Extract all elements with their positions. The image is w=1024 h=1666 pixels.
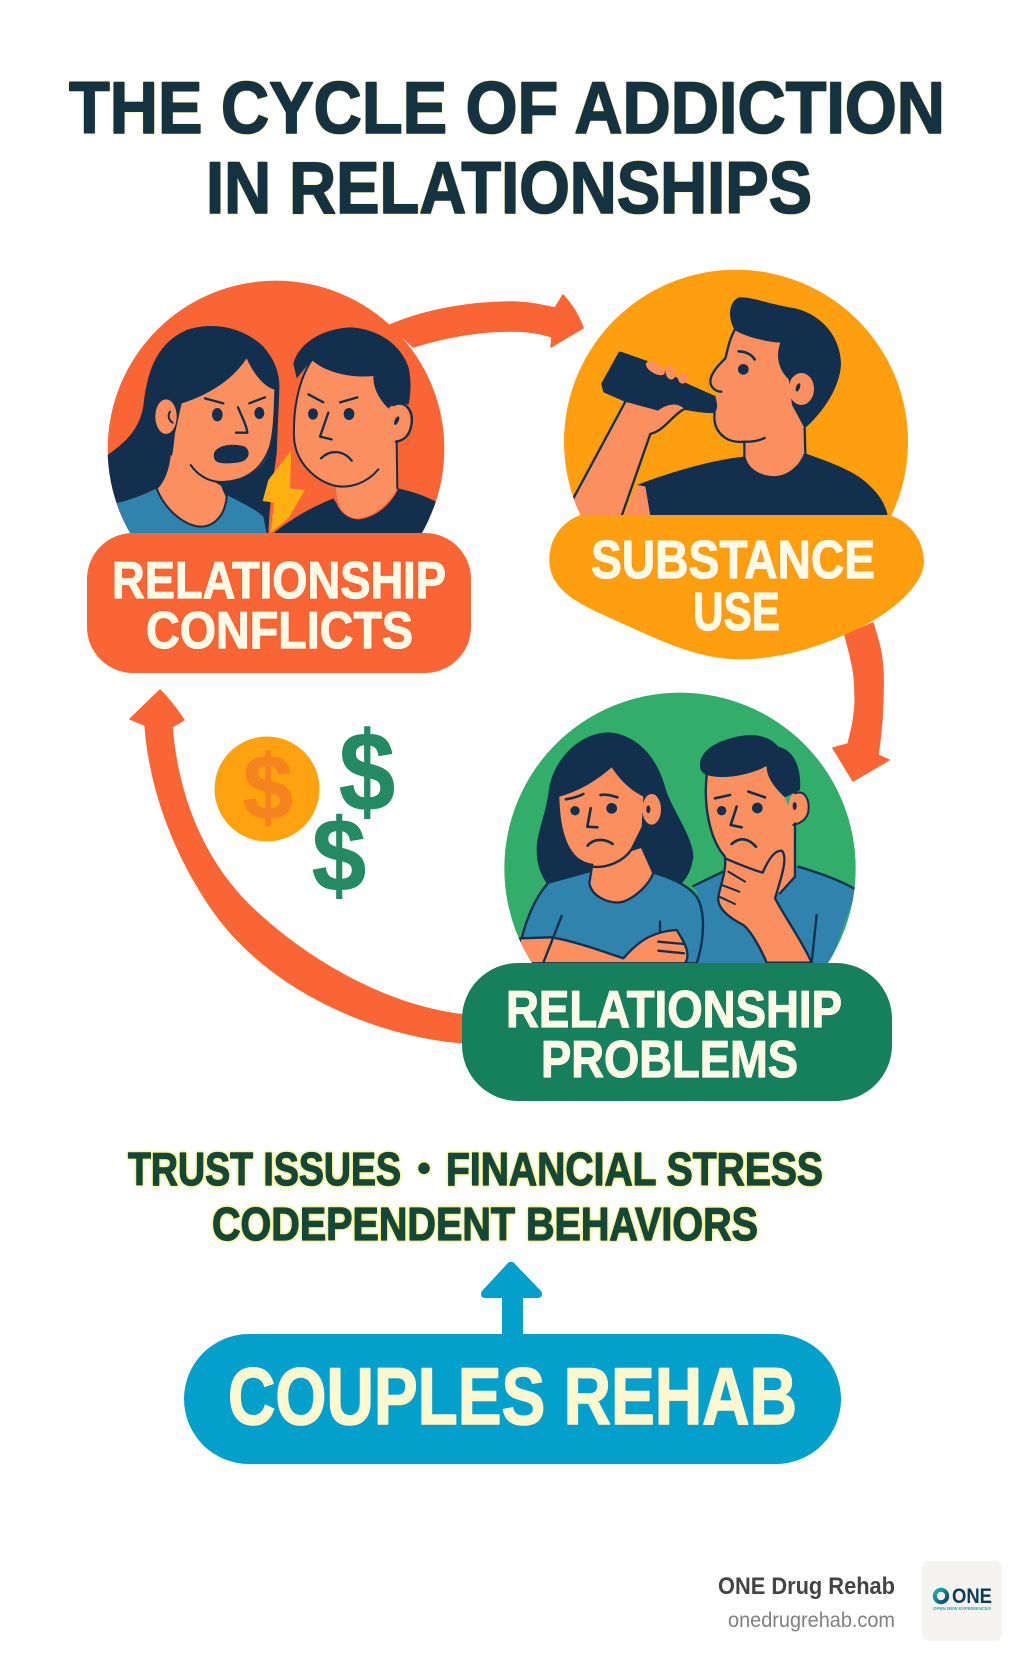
label: relationship problems: [462, 963, 892, 1101]
label: substance use: [591, 530, 875, 642]
footer: brand text: ONE Drug Rehab: [718, 1573, 895, 1600]
logo: ONE: ONE: [952, 1585, 992, 1608]
arrow: couples rehab upward: [481, 1262, 542, 1336]
text block: effects: TRUST ISSUES: [128, 1143, 401, 1195]
label: relationship problems: RELATIONSHIP: [506, 981, 842, 1039]
icon: coin: [214, 736, 320, 842]
text block: effects: CODEPENDENT BEHAVIORS: [212, 1198, 758, 1250]
panel: substance use: [549, 270, 924, 659]
title: [69, 68, 945, 229]
illustration: arguing couple: [108, 280, 444, 534]
footer: brand text: [718, 1573, 895, 1632]
panel: relationship conflicts: [87, 281, 471, 673]
text block: effects: FINANCIAL STRESS: [446, 1143, 823, 1195]
arrow: relationship problems back to conflicts: [130, 690, 464, 1043]
panel: relationship problems: [462, 693, 892, 1101]
label: relationship conflicts: [87, 533, 471, 673]
illustration: worried couple: [504, 692, 856, 963]
arrow: substance use to relationship problems: [833, 623, 889, 781]
panel: couples rehab: [184, 1334, 841, 1464]
label: relationship conflicts: CONFLICTS: [146, 602, 413, 660]
logo: ONE: OPEN NEW EXPERIENCES: [933, 1606, 991, 1611]
title: IN RELATIONSHIPS: [206, 148, 812, 229]
illustration: man drinking from bottle: [549, 270, 924, 659]
title: THE CYCLE OF ADDICTION: [69, 68, 945, 149]
arrow: conflicts to substance use: [390, 295, 583, 347]
text block: effects: •: [418, 1147, 430, 1188]
text block: effects: [128, 1143, 823, 1250]
label: relationship problems: PROBLEMS: [541, 1031, 798, 1089]
label: substance use: SUBSTANCE: [591, 530, 875, 590]
label: substance use: USE: [693, 582, 780, 642]
panel: couples rehab: COUPLES REHAB: [228, 1352, 797, 1442]
icon: dollar signs: $: [339, 709, 395, 834]
icon: dollar signs: [312, 709, 395, 913]
icon: dollar signs: $: [312, 798, 366, 913]
footer: brand text: onedrugrehab.com: [728, 1609, 895, 1632]
label: relationship conflicts: RELATIONSHIP: [112, 552, 446, 610]
icon: coin: $: [243, 737, 293, 839]
logo: ONE: [922, 1561, 1002, 1641]
